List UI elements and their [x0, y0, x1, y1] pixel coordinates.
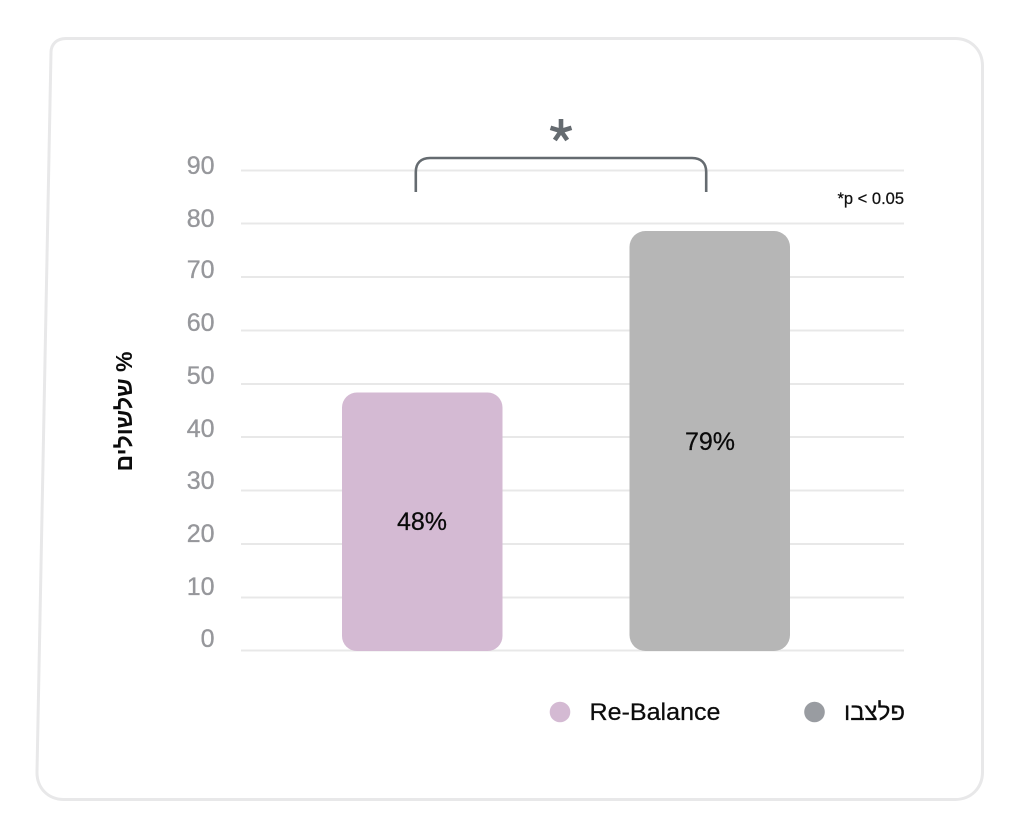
- y axis labels: 20: [187, 520, 214, 548]
- legend: [550, 699, 905, 726]
- bar: Re-Balance 48%: [342, 392, 502, 651]
- y axis labels: 40: [187, 415, 214, 443]
- significance star: [550, 119, 572, 140]
- bar: placebo 79%: [630, 231, 790, 651]
- legend item: Re-Balance: Re-Balance: [590, 699, 720, 726]
- bar: placebo 79%: 79%: [685, 428, 735, 456]
- grid lines: [241, 170, 904, 650]
- chart: bar chart: [111, 119, 904, 653]
- p value note: *p < 0.05: [837, 190, 904, 208]
- y axis labels: 0: [201, 625, 214, 653]
- legend item: placebo: פלצבו: [844, 699, 905, 726]
- y axis labels: 90: [187, 152, 214, 180]
- bar: Re-Balance 48%: 48%: [397, 508, 447, 536]
- y axis labels: [187, 152, 214, 653]
- y axis labels: 50: [187, 362, 214, 390]
- y axis labels: 10: [187, 573, 214, 601]
- y axis labels: 70: [187, 256, 214, 284]
- y axis title: % שלשולים: [111, 352, 137, 471]
- legend item: placebo: [804, 699, 905, 726]
- significance bracket: [416, 158, 706, 192]
- y axis labels: 30: [187, 467, 214, 495]
- y axis labels: 60: [187, 309, 214, 337]
- y axis labels: 80: [187, 205, 214, 233]
